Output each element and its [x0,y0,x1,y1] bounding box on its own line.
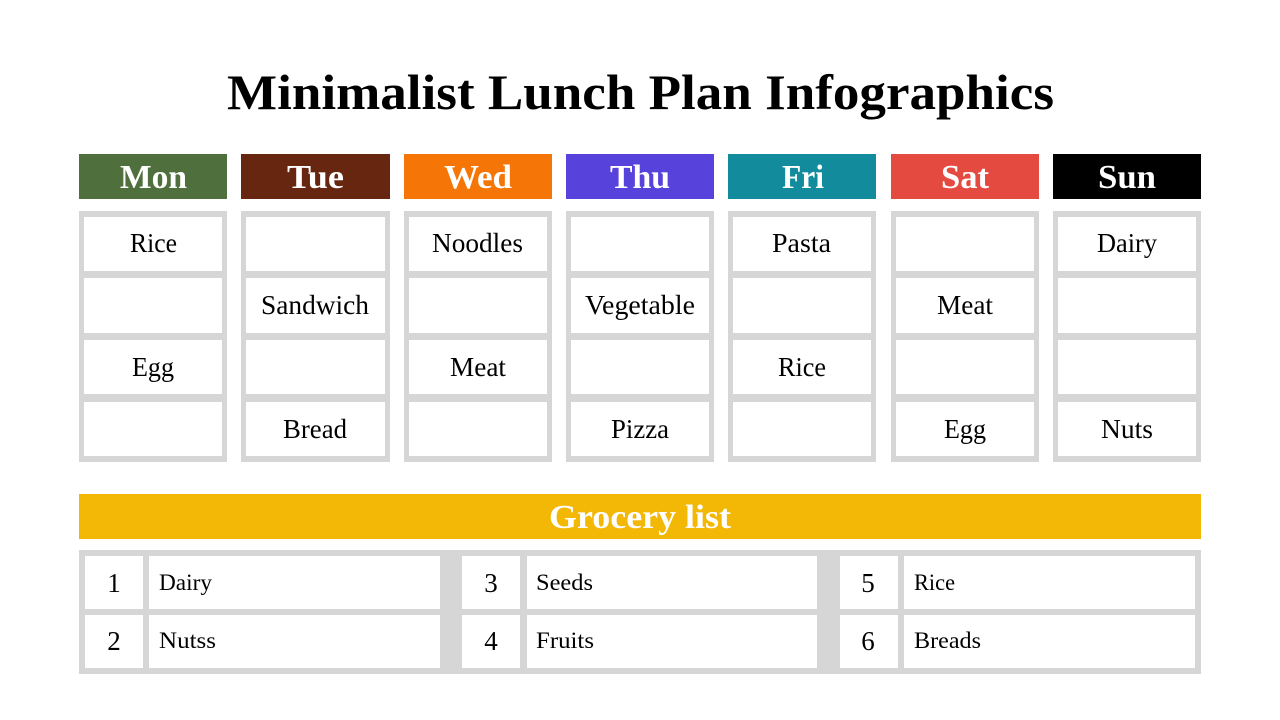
column: Sunday [1053,154,1201,462]
grocery item 1: 1 [107,568,121,598]
header: Tue: Tue [287,159,344,196]
table: Monday meals [79,211,227,462]
table: Sunday meals: Dairy [1097,228,1157,258]
table: Monday meals: Rice [130,228,177,258]
grocery item 6: 6 [861,626,875,656]
header: Wed [404,154,552,199]
banner: Grocery list [79,494,1201,539]
table: Monday meals: Egg [132,352,174,382]
column: Wednesday [404,154,552,462]
grocery item 6 [840,615,1195,668]
header: Tue [241,154,390,199]
grocery item 4 [462,615,817,668]
table: Saturday meals: Meat [937,290,993,320]
header: Sun: Sun [1098,159,1156,196]
header: Mon [79,154,227,199]
grocery item 6: Breads [914,628,981,653]
table: Wednesday meals [404,211,552,462]
table: Wednesday meals: Meat [450,352,506,382]
grocery item 4: Fruits [536,628,594,653]
column: Thursday [566,154,714,462]
table: Wednesday meals: Noodles [432,228,523,258]
grocery item 3: 3 [484,568,498,598]
column: Saturday [891,154,1039,462]
column: Tuesday [241,154,390,462]
header: Wed: Wed [444,159,512,196]
grocery item 2 [85,615,440,668]
header: Sun [1053,154,1201,199]
table: Thursday meals [566,211,714,462]
table: Sunday meals: Nuts [1101,414,1153,444]
grocery item 1: Dairy [159,570,212,595]
table: Tuesday meals [241,211,390,462]
table: Tuesday meals: Sandwich [261,290,370,320]
grocery item 3: Seeds [536,570,593,595]
table: Thursday meals: Pizza [611,414,669,444]
table: Tuesday meals: Bread [283,414,347,444]
table: Saturday meals [891,211,1039,462]
grocery item 5 [840,556,1195,609]
table: Friday meals [728,211,876,462]
table: Thursday meals: Vegetable [585,290,695,320]
table: Saturday meals: Egg [944,414,986,444]
header: Thu [566,154,714,199]
grocery item 2: 2 [107,626,121,656]
header: Mon: Mon [120,159,187,196]
grocery item 3 [462,556,817,609]
table: Sunday meals [1053,211,1201,462]
header: Sat: Sat [941,159,990,196]
table: Friday meals: Pasta [772,228,831,258]
header: Fri [728,154,876,199]
column: Monday [79,154,227,462]
header: Sat [891,154,1039,199]
grocery item 4: 4 [484,626,498,656]
title: Minimalist Lunch Plan Infographics [227,64,1054,120]
column: Friday [728,154,876,462]
table: Friday meals: Rice [778,352,826,382]
header: Fri: Fri [782,159,824,196]
panel: grocery table [79,550,1201,674]
grocery item 5: 5 [861,568,875,598]
grocery item 2: Nutss [159,628,216,653]
header: Thu: Thu [610,159,670,196]
grocery item 1 [85,556,440,609]
grocery item 5: Rice [914,570,955,595]
banner: Grocery list: Grocery list [549,499,732,536]
